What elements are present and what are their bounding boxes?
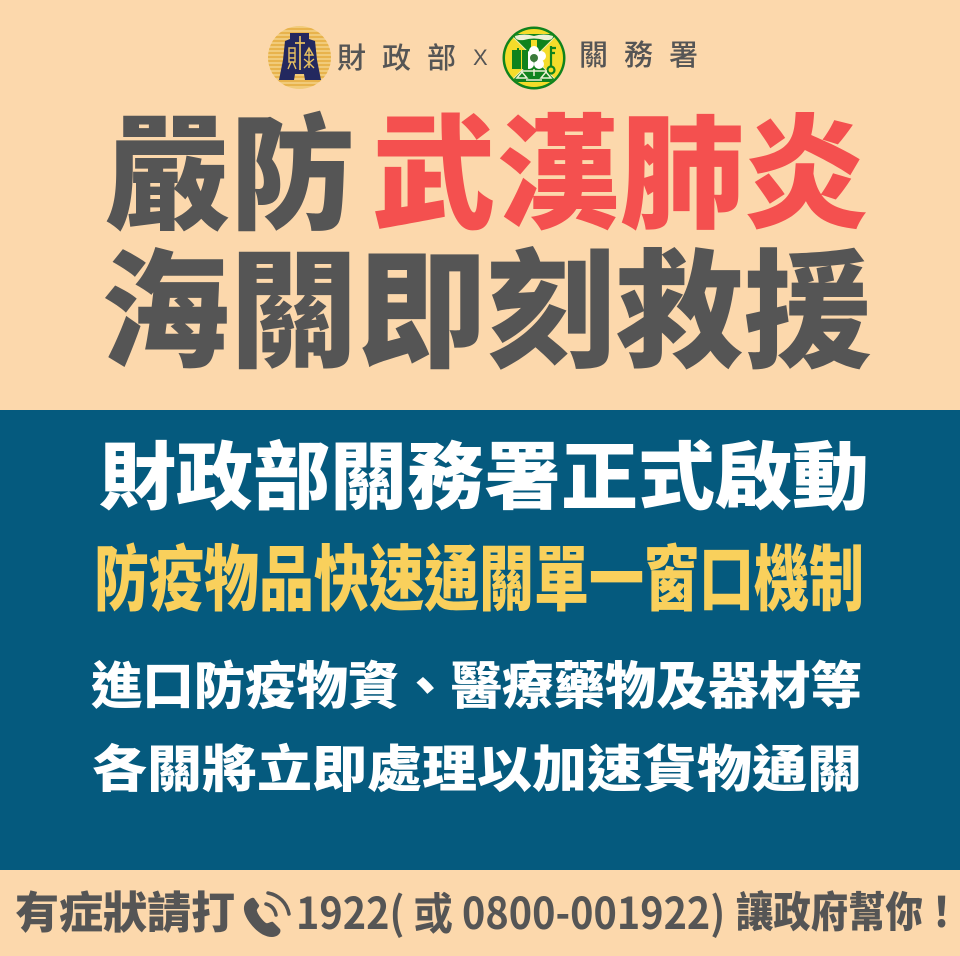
panel: blue information panel: [0, 410, 960, 870]
heading: white: 財政部關務署正式啟動: [99, 419, 869, 525]
footer closing text: 讓政府幫你！: [736, 879, 960, 940]
icon: phone: [244, 891, 291, 937]
body line 1: 進口防疫物資、醫療藥物及器材等: [91, 644, 862, 719]
title: [101, 74, 872, 395]
ministry name: 財政部: [337, 35, 472, 77]
heading: yellow: 防疫物品快速通關單一窗口機制: [94, 521, 864, 625]
icon: Ministry of Finance logo: [268, 26, 331, 89]
customs name: 關務署: [579, 32, 714, 74]
x mark: X: [473, 45, 488, 70]
title line 1 red: 武漢肺炎: [372, 74, 868, 254]
icon: Customs Administration logo: [502, 26, 566, 90]
title line 1 dark: 嚴防: [105, 74, 355, 255]
footer: [0, 870, 960, 956]
body line 2: 各關將立即處理以加速貨物通關: [92, 728, 862, 802]
title line 2: 海關即刻救援: [101, 209, 872, 395]
footer hotline text: 1922( 或 0800-001922): [296, 878, 725, 942]
header logos: [268, 26, 714, 90]
footer lead text: 有症狀請打: [15, 877, 235, 941]
